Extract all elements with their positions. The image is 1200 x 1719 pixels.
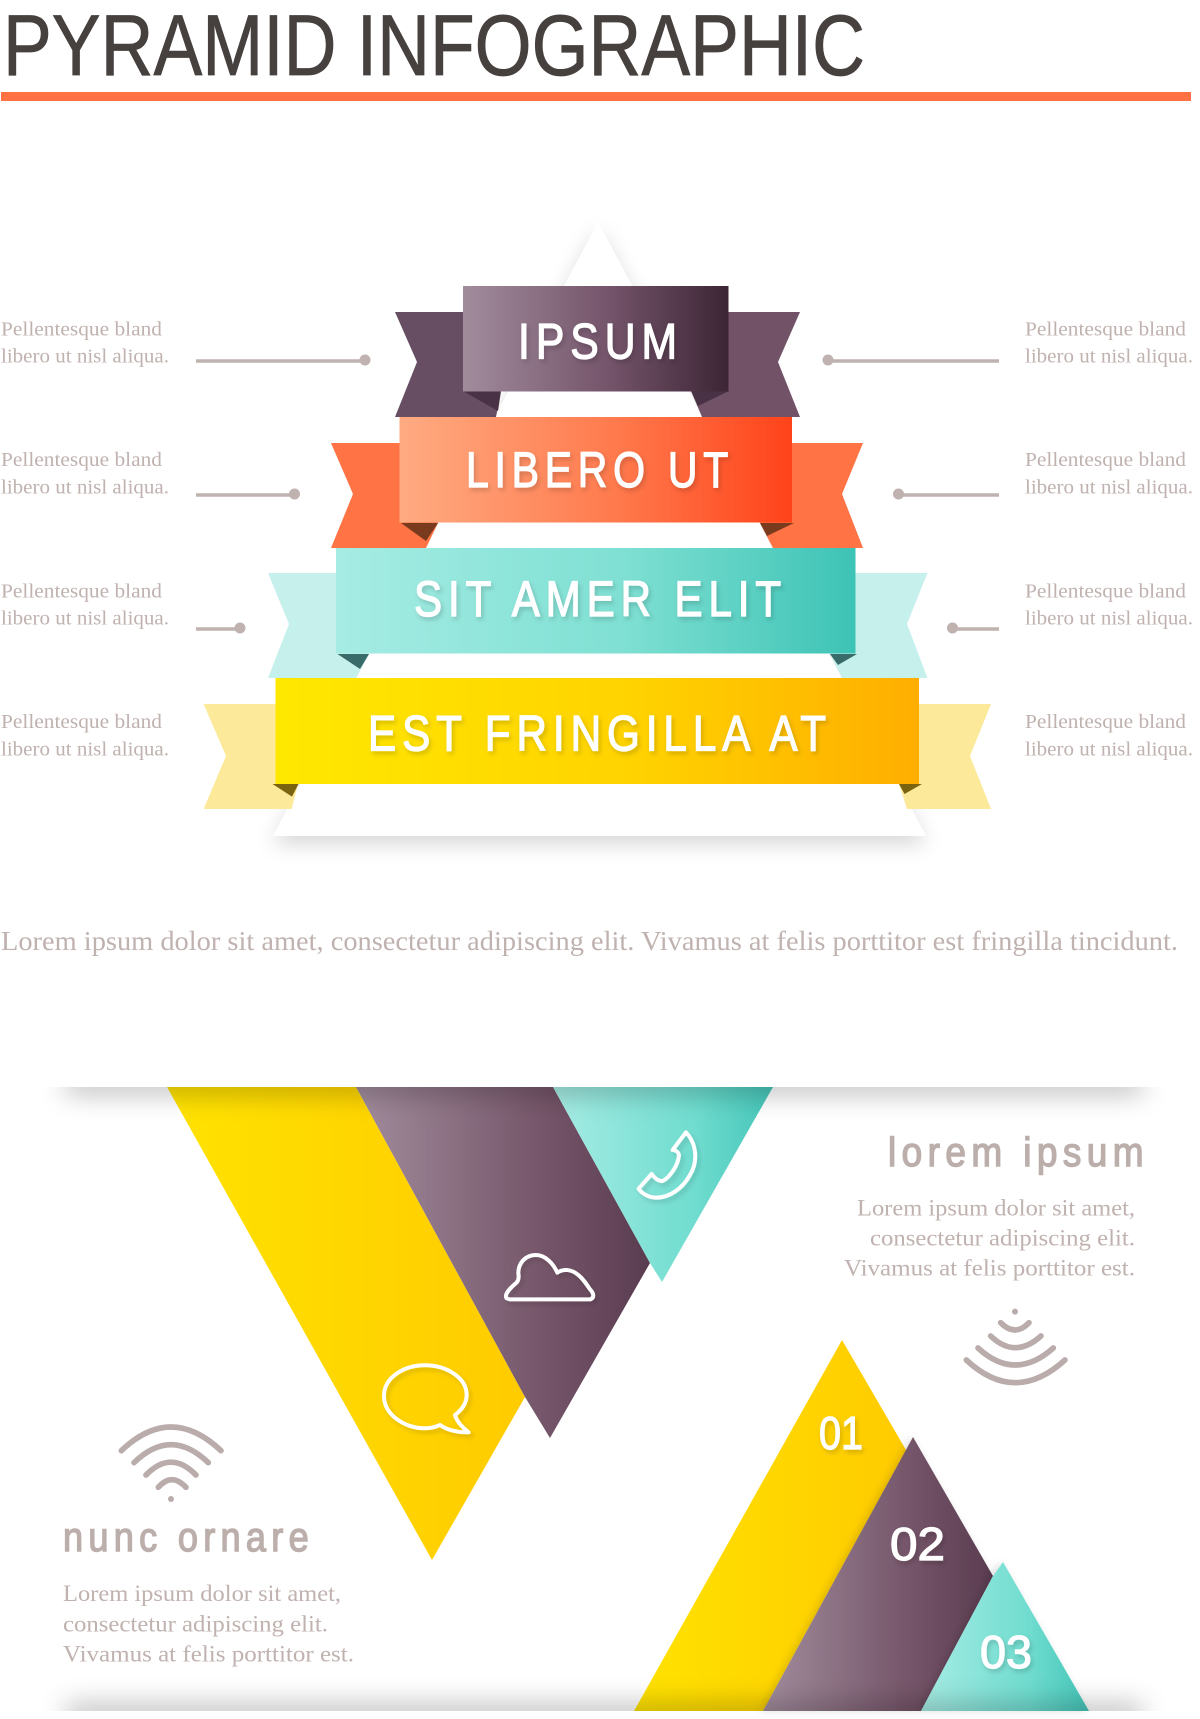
title rule	[1, 92, 1191, 101]
icon: speech bubble	[384, 1365, 469, 1432]
icon: inverted wifi	[966, 1309, 1065, 1383]
white pyramid	[273, 222, 926, 836]
callout left 4	[1, 711, 169, 760]
callout left 1	[1, 318, 370, 368]
callout left 4: Pellentesque bland	[1, 711, 162, 733]
icon: cloud	[506, 1255, 593, 1299]
icon: phone	[639, 1132, 695, 1198]
left callouts	[1, 318, 370, 760]
ribbon: ipsum: IPSUM	[518, 314, 683, 370]
segment yellow	[167, 1087, 525, 1560]
callout right 2	[893, 449, 1193, 500]
ribbon: est fringilla at	[204, 678, 991, 809]
callout left 2	[1, 449, 300, 500]
callout right 1: libero ut nisl aliqua.	[1025, 346, 1193, 368]
segment 01 yellow: 01	[819, 1407, 863, 1459]
segment purple	[356, 1087, 650, 1438]
ribbon: est fringilla at: EST FRINGILLA AT	[368, 706, 832, 762]
text: left paragraph: Vivamus at felis porttitor est.	[63, 1642, 354, 1666]
ribbon: libero ut	[331, 417, 863, 548]
callout right 3	[947, 580, 1193, 634]
text: right paragraph: consectetur adipiscing elit.	[870, 1226, 1135, 1250]
callout left 3: libero ut nisl aliqua.	[1, 608, 169, 630]
callout right 2: libero ut nisl aliqua.	[1025, 476, 1193, 498]
text: right paragraph	[844, 1196, 1135, 1280]
right callouts	[822, 318, 1193, 760]
callout left 2: libero ut nisl aliqua.	[1, 476, 169, 498]
segment 01 yellow	[634, 1340, 906, 1711]
ribbon: sit amer elit	[268, 548, 928, 678]
segment teal	[553, 1087, 773, 1282]
callout left 1: libero ut nisl aliqua.	[1, 346, 169, 368]
callout left 4: libero ut nisl aliqua.	[1, 738, 169, 760]
callout right 1	[822, 318, 1193, 368]
callout right 3: Pellentesque bland	[1025, 580, 1186, 602]
text: right paragraph: Lorem ipsum dolor sit amet,	[857, 1196, 1135, 1220]
numbered triangle chart	[634, 1340, 1089, 1711]
ribbon: ipsum	[395, 286, 800, 417]
bottom shadow bar	[66, 1704, 1142, 1719]
segment 03 teal: 03	[980, 1626, 1032, 1678]
segment 02 purple	[763, 1437, 993, 1711]
inverted triangle chart	[167, 1087, 773, 1560]
heading: nunc ornare: nunc ornare	[63, 1514, 314, 1560]
ribbon: sit amer elit: SIT AMER ELIT	[414, 571, 787, 627]
top shadow bar	[66, 1072, 1142, 1094]
text: left paragraph: consectetur adipiscing elit.	[63, 1612, 328, 1636]
text: right paragraph: Vivamus at felis porttitor est.	[844, 1256, 1135, 1280]
text: left paragraph	[63, 1581, 354, 1666]
body text: Lorem ipsum dolor sit amet, consectetur adipiscing elit. Vivamus at felis porttitor est fringilla tincidunt.	[1, 926, 1178, 956]
callout left 1: Pellentesque bland	[1, 318, 162, 340]
segment 02 purple: 02	[890, 1518, 945, 1570]
segment 03 teal	[921, 1562, 1089, 1711]
callout right 4	[1025, 711, 1193, 760]
text: left paragraph: Lorem ipsum dolor sit amet,	[63, 1581, 341, 1606]
title: PYRAMID INFOGRAPHIC	[3, 0, 865, 94]
ribbon: libero ut: LIBERO UT	[466, 442, 734, 498]
callout right 3: libero ut nisl aliqua.	[1025, 608, 1193, 630]
icon: wifi	[121, 1427, 221, 1502]
callout left 3	[1, 580, 246, 634]
callout left 3: Pellentesque bland	[1, 580, 162, 602]
callout right 4: Pellentesque bland	[1025, 711, 1186, 733]
heading: lorem ipsum: lorem ipsum	[888, 1129, 1149, 1175]
callout left 2: Pellentesque bland	[1, 449, 162, 471]
callout right 1: Pellentesque bland	[1025, 318, 1186, 340]
callout right 2: Pellentesque bland	[1025, 449, 1186, 471]
callout right 4: libero ut nisl aliqua.	[1025, 738, 1193, 760]
